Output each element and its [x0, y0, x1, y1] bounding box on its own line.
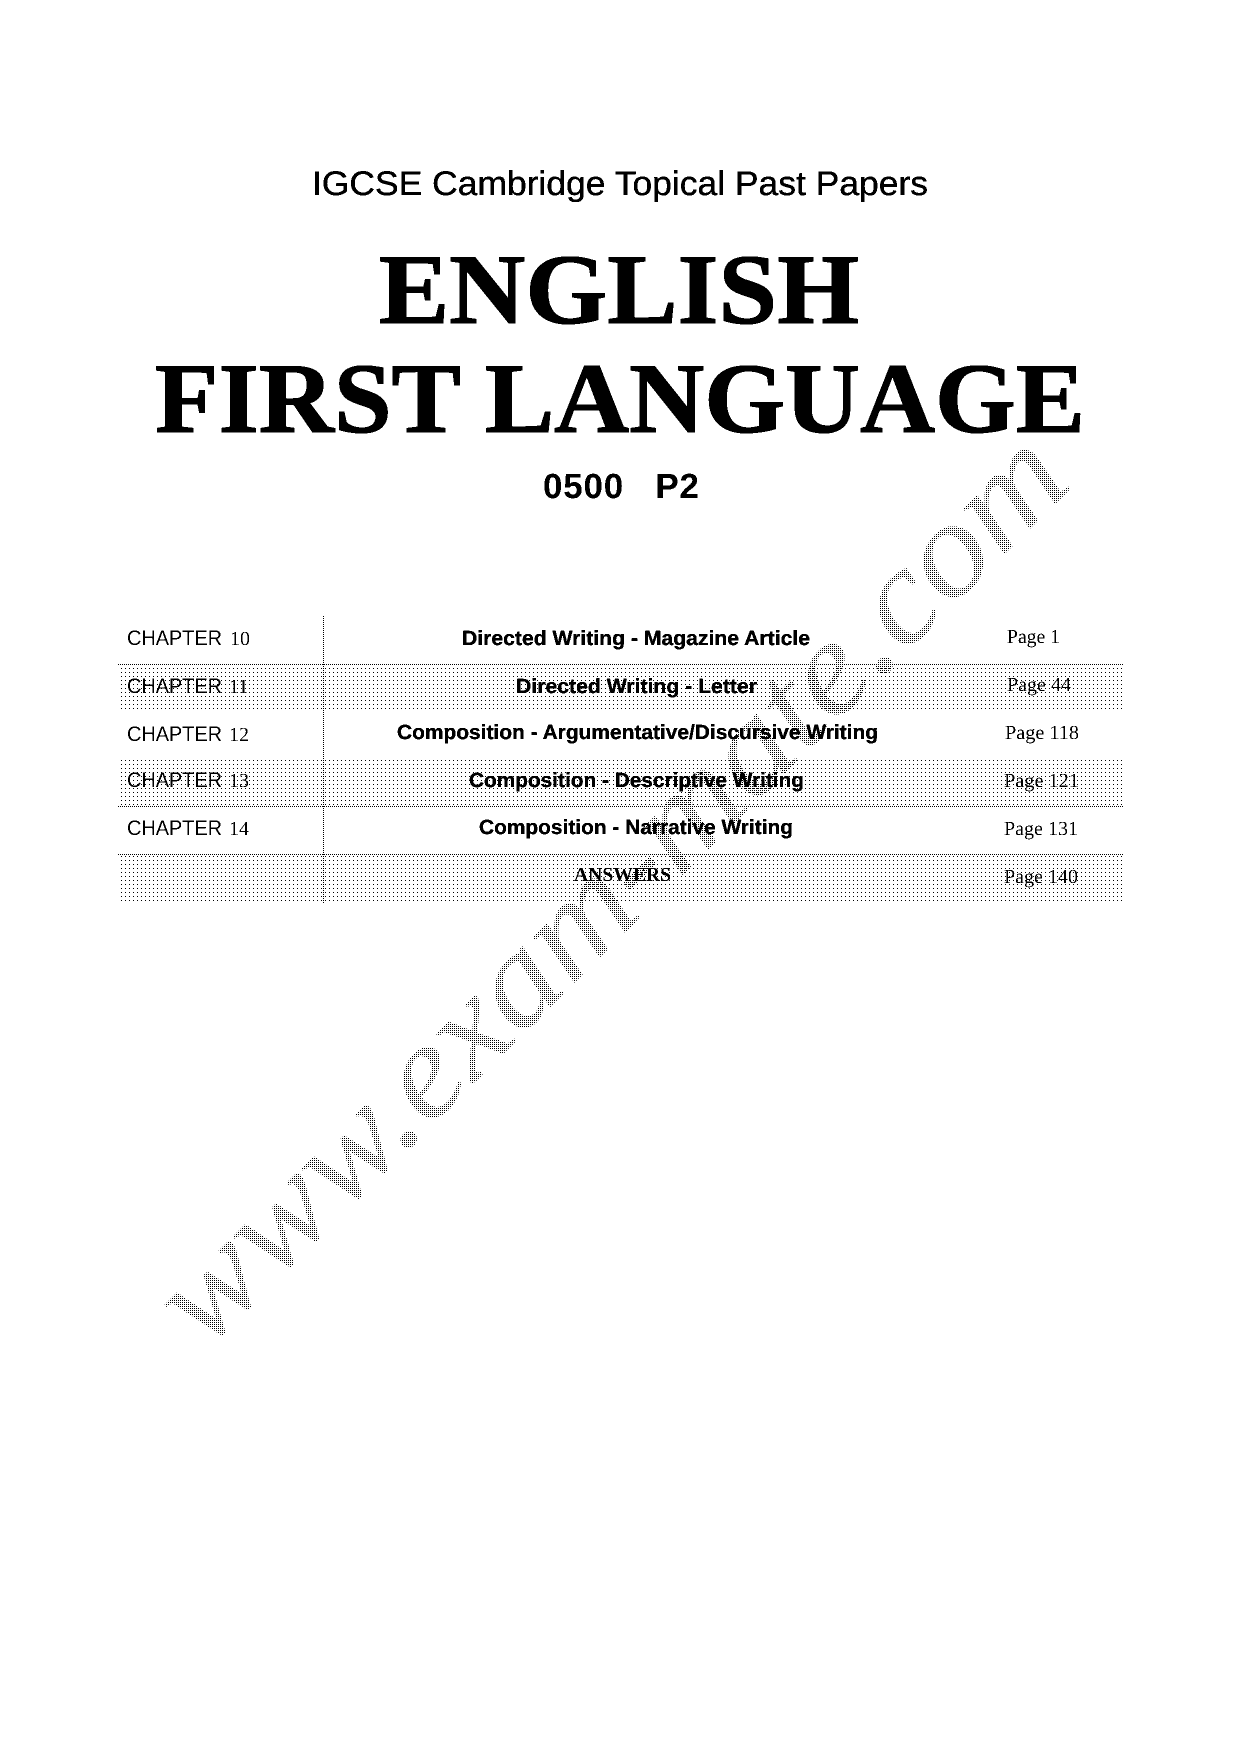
row: chapter 11	[127, 674, 1071, 698]
row: chapter 13: CHAPTER	[127, 769, 222, 792]
row: chapter 13: 13	[229, 770, 249, 792]
row: chapter 14: Composition - Narrative Writing	[479, 816, 793, 839]
row: answers: Page 140	[1004, 866, 1078, 888]
subtitle: IGCSE Cambridge Topical Past Papers	[312, 165, 928, 203]
title	[155, 234, 1085, 454]
row: chapter 14: CHAPTER	[127, 817, 222, 840]
row: chapter 10	[127, 626, 1060, 650]
row: chapter 12: Composition - Argumentative/Discursive Writing	[397, 721, 878, 744]
row: chapter 13: Page 121	[1004, 770, 1079, 792]
row: chapter 10: 10	[230, 628, 250, 650]
row: chapter 14: Page 131	[1004, 818, 1078, 840]
row: chapter 12: Page 118	[1005, 722, 1079, 744]
table shaded bands	[117, 616, 1124, 903]
row: answers: ANSWERS	[574, 864, 671, 886]
row: chapter 10: Page 1	[1007, 626, 1060, 648]
row: chapter 11: 11	[229, 676, 248, 698]
row: chapter 14: 14	[229, 818, 249, 840]
row: chapter 12: 12	[229, 724, 249, 746]
chapter table text	[127, 626, 1079, 888]
title: FIRST LANGUAGE	[155, 343, 1085, 454]
row: chapter 11: Directed Writing - Letter	[516, 675, 757, 698]
row: chapter 11: CHAPTER	[127, 675, 222, 698]
row: chapter 10: CHAPTER	[127, 627, 222, 650]
row: chapter 10: Directed Writing - Magazine Article	[462, 627, 810, 650]
row: chapter 13: Composition - Descriptive Writing	[469, 769, 804, 792]
row: chapter 12: CHAPTER	[127, 723, 222, 746]
row: chapter 13	[127, 769, 1079, 792]
syllabus code: 0500 P2	[543, 467, 699, 506]
row: chapter 12	[127, 721, 1079, 746]
row: answers	[574, 864, 1078, 888]
row: chapter 14	[127, 816, 1078, 840]
title: ENGLISH	[379, 234, 859, 345]
row: chapter 11: Page 44	[1007, 674, 1071, 696]
watermark	[150, 440, 1100, 1370]
